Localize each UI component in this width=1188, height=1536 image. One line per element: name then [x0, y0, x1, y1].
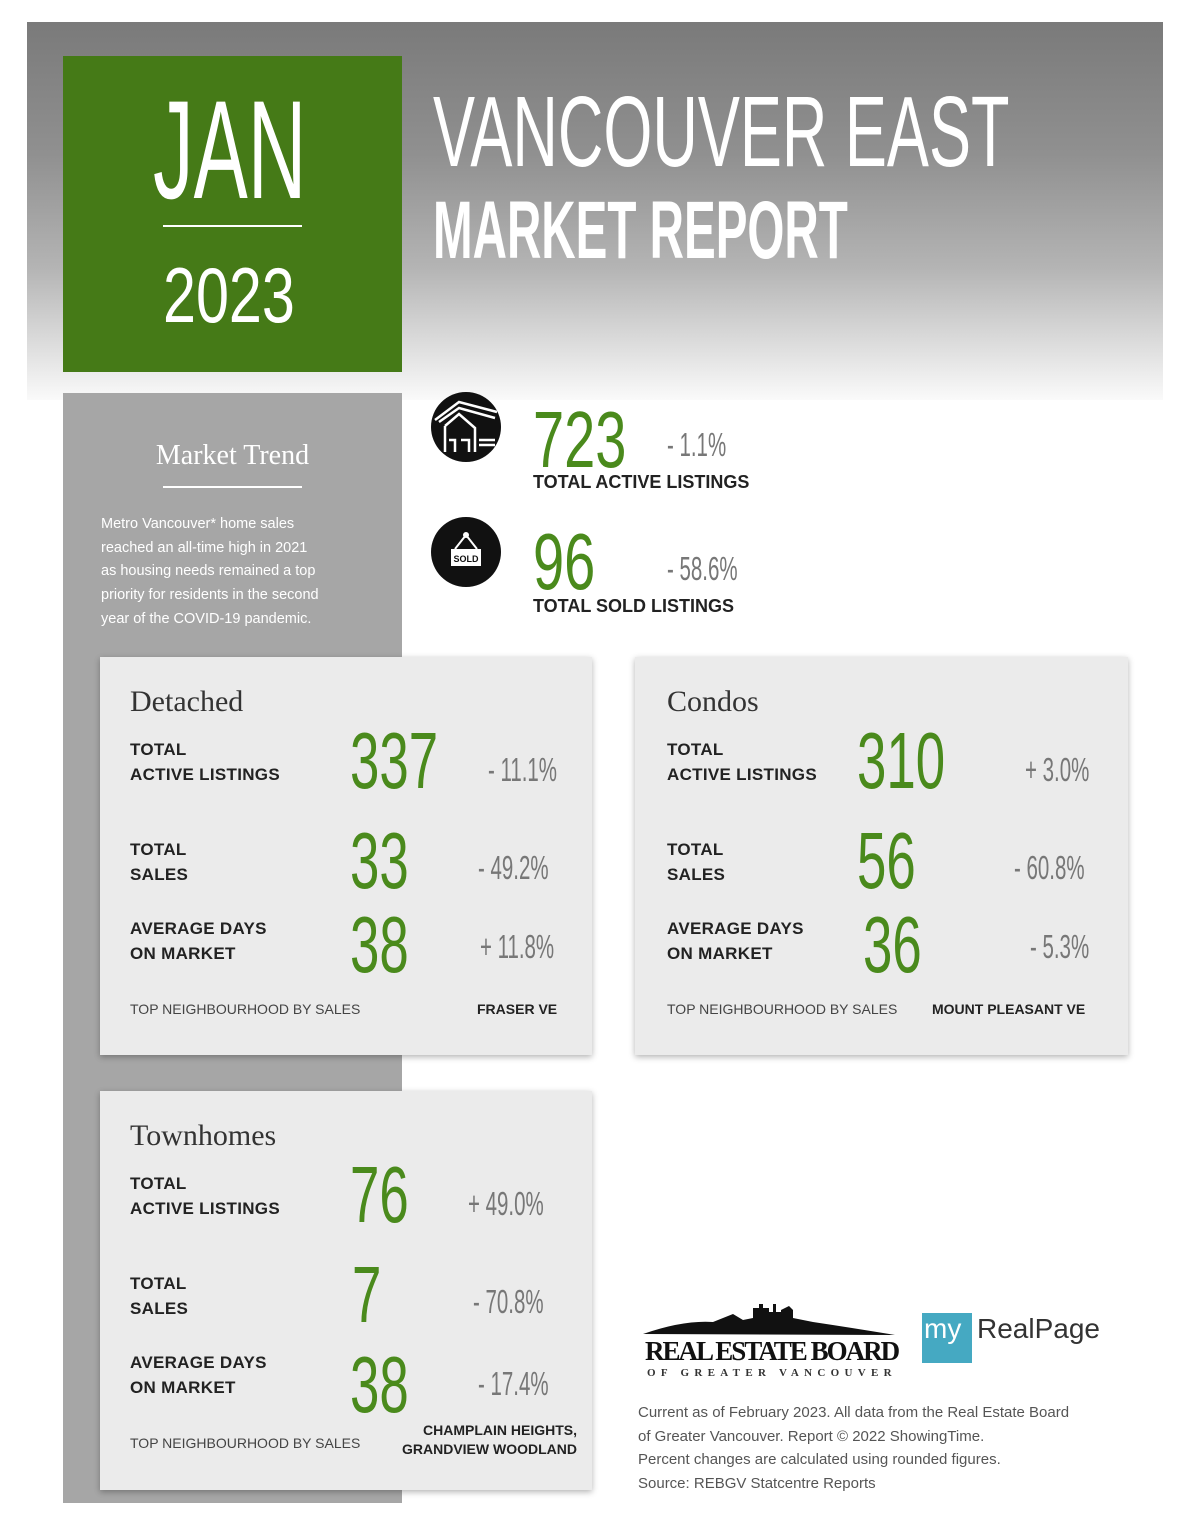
market trend: year of the COVID-19 pandemic.: [101, 611, 311, 627]
panel: condos: AVERAGE DAYS: [667, 919, 804, 938]
logo: real estate board: OF GREATER VANCOUVER: [647, 1367, 897, 1379]
stat: sold listings: TOTAL SOLD LISTINGS: [533, 596, 734, 616]
footnote: Source: REBGV Statcentre Reports: [638, 1475, 876, 1492]
panel: condos: 310: [857, 716, 945, 805]
footnote: of Greater Vancouver. Report © 2022 ShowingTime.: [638, 1428, 984, 1445]
panel: townhomes: ON MARKET: [130, 1378, 236, 1397]
panel: townhomes: 7: [352, 1250, 381, 1339]
panel: condos: MOUNT PLEASANT VE: [932, 1001, 1085, 1017]
title: MARKET REPORT: [433, 185, 848, 276]
stat: sold listings: - 58.6%: [667, 550, 738, 587]
panel: detached: SALES: [130, 865, 188, 884]
panel: townhomes: TOTAL: [130, 1174, 187, 1193]
logo: real estate board: [643, 1304, 899, 1379]
footnote: Percent changes are calculated using rounded figures.: [638, 1451, 1001, 1468]
logo: real estate board: REAL ESTATE BOARD: [645, 1336, 898, 1366]
market trend: reached an all-time high in 2021: [101, 540, 307, 556]
footnote: [638, 1404, 1069, 1492]
title: [433, 76, 1009, 276]
panel: townhomes: GRANDVIEW WOODLAND: [402, 1441, 577, 1457]
stat: active listings: 723: [533, 395, 626, 484]
logo: myRealPage: RealPage: [977, 1313, 1100, 1344]
icon: house: [431, 392, 501, 462]
icon: sold sign: SOLD: [453, 554, 479, 564]
panel: townhomes: TOP NEIGHBOURHOOD BY SALES: [130, 1435, 360, 1451]
panel: condos: SALES: [667, 865, 725, 884]
panel: townhomes: + 49.0%: [468, 1185, 544, 1222]
panel: condos: [635, 657, 1128, 1055]
panel: detached: ON MARKET: [130, 944, 236, 963]
header background: [27, 22, 1163, 400]
date box: [63, 56, 402, 372]
panel: detached: AVERAGE DAYS: [130, 919, 267, 938]
panel: townhomes: ACTIVE LISTINGS: [130, 1199, 280, 1218]
panel: townhomes: [100, 1091, 592, 1490]
panel: detached: 38: [350, 900, 409, 989]
panel: condos: TOTAL: [667, 840, 724, 859]
panel: detached: 33: [350, 816, 409, 905]
panel: townhomes: CHAMPLAIN HEIGHTS,: [423, 1422, 577, 1438]
panel: condos: TOP NEIGHBOURHOOD BY SALES: [667, 1001, 897, 1017]
panel: detached: TOTAL: [130, 840, 187, 859]
panel: detached: ACTIVE LISTINGS: [130, 765, 280, 784]
panel: detached: - 49.2%: [478, 849, 549, 886]
panel: detached: 337: [350, 716, 438, 805]
month: JAN: [153, 71, 306, 228]
panel: detached: TOTAL: [130, 740, 187, 759]
market trend: priority for residents in the second: [101, 587, 319, 603]
title: VANCOUVER EAST: [433, 76, 1009, 188]
panel: townhomes: - 17.4%: [478, 1365, 549, 1402]
stat: active listings: TOTAL ACTIVE LISTINGS: [533, 472, 749, 492]
panel: condos: 56: [857, 816, 916, 905]
panel: townhomes: SALES: [130, 1299, 188, 1318]
footnote: Current as of February 2023. All data from the Real Estate Board: [638, 1404, 1069, 1421]
panel: condos: - 5.3%: [1030, 928, 1089, 965]
panel: townhomes: 38: [350, 1340, 409, 1429]
panel: condos: - 60.8%: [1014, 849, 1085, 886]
icon: sold sign: [431, 517, 501, 587]
panel: townhomes: 76: [350, 1150, 409, 1239]
panel: detached: + 11.8%: [480, 928, 554, 965]
stat: sold listings: [533, 517, 738, 616]
panel: condos: 36: [863, 900, 922, 989]
market trend: [101, 440, 319, 627]
market trend: Metro Vancouver* home sales: [101, 516, 294, 532]
market trend: Market Trend: [156, 440, 309, 471]
panel: townhomes: TOTAL: [130, 1274, 187, 1293]
panel: detached: Detached: [130, 685, 243, 718]
panel: detached: - 11.1%: [488, 751, 557, 788]
panel: detached: TOP NEIGHBOURHOOD BY SALES: [130, 1001, 360, 1017]
logo: myRealPage: [922, 1313, 1100, 1363]
market trend: as housing needs remained a top: [101, 563, 315, 579]
year: 2023: [163, 251, 295, 339]
panel: townhomes: AVERAGE DAYS: [130, 1353, 267, 1372]
panel: condos: TOTAL: [667, 740, 724, 759]
panel: condos: ACTIVE LISTINGS: [667, 765, 817, 784]
stat: active listings: - 1.1%: [667, 426, 726, 463]
stat: active listings: [533, 395, 749, 492]
panel: detached: [100, 657, 592, 1055]
stat: sold listings: 96: [533, 517, 595, 606]
panel: detached: FRASER VE: [477, 1001, 557, 1017]
panel: condos: Condos: [667, 685, 759, 718]
panel: condos: + 3.0%: [1025, 751, 1089, 788]
panel: townhomes: Townhomes: [130, 1119, 276, 1152]
logo: myRealPage: my: [924, 1313, 961, 1344]
sidebar: [63, 393, 402, 1503]
panel: townhomes: - 70.8%: [473, 1283, 544, 1320]
panel: condos: ON MARKET: [667, 944, 773, 963]
